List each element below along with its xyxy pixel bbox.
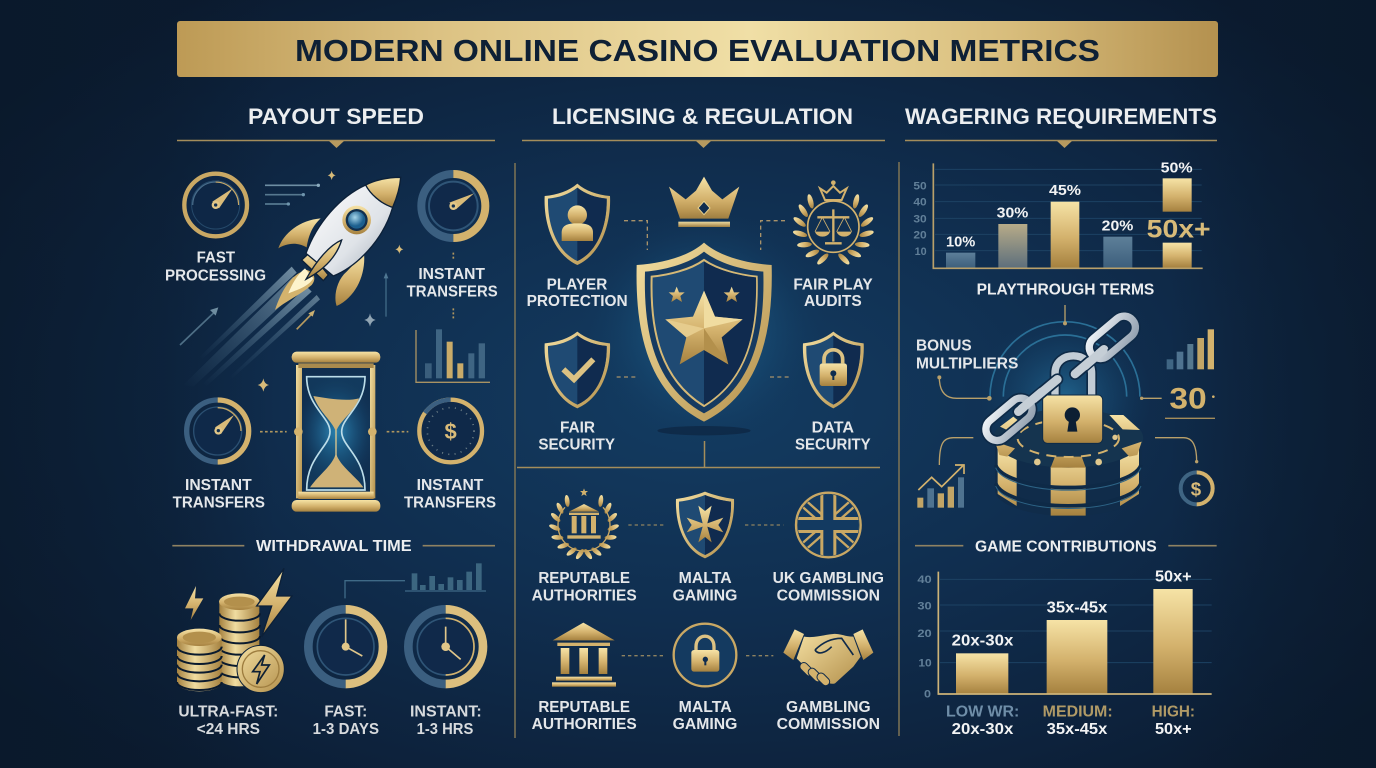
heading: wagering requirements (905, 104, 1217, 148)
bar chart: wagering percentages: 30% (997, 206, 1028, 222)
label: malta gaming 1: GAMING (673, 587, 737, 604)
label: bonus multipliers (916, 338, 1018, 372)
label: reputable authorities 1 (532, 570, 637, 604)
label: data security (795, 419, 871, 453)
icon: dollar dial: $ (445, 419, 457, 444)
icon: clock instant (408, 609, 483, 684)
label: ultra-fast tier (178, 704, 278, 738)
icon: hourglass (260, 352, 408, 512)
icon: lock circle (674, 624, 736, 686)
label: instant transfers right: TRANSFERS (404, 494, 496, 511)
callout: 30 multiplier (1140, 382, 1215, 418)
heading: payout speed (177, 104, 495, 148)
label: instant transfers left: TRANSFERS (173, 494, 265, 511)
label: fair security: FAIR (560, 419, 595, 436)
bar chart: wagering percentages: 10% (946, 235, 975, 251)
label: medium wagering: 35x-45x (1047, 721, 1108, 738)
panel: licensing and regulation (517, 104, 885, 733)
label: fast processing: PROCESSING (165, 268, 266, 285)
label: fast processing: FAST (197, 250, 235, 267)
column divider left (514, 163, 516, 738)
icon: malta shield (676, 492, 734, 558)
heading: payout speed: PAYOUT SPEED (248, 104, 424, 129)
label: ultra-fast tier: ULTRA-FAST: (178, 704, 278, 721)
label: uk gambling commission: COMMISSION (777, 587, 880, 604)
label: malta gaming 2: GAMING (673, 716, 737, 733)
label: data security: DATA (812, 419, 854, 436)
bar chart: game contributions: 10 (918, 658, 932, 670)
icon: rising chart (917, 438, 973, 508)
icon: check shield (545, 332, 610, 408)
label: uk gambling commission: UK GAMBLING (773, 570, 884, 587)
label: instant transfers top: INSTANT (418, 266, 485, 283)
label: fair security (538, 419, 615, 453)
icon: rocket with trail (183, 177, 401, 387)
label: reputable authorities 2 (532, 699, 637, 733)
icon: crown (669, 177, 739, 227)
icon: gauge fast processing (184, 174, 247, 236)
icon: player shield (545, 184, 610, 265)
bar chart: game contributions: 50x+ (1155, 569, 1192, 586)
label: malta gaming 2 (673, 699, 737, 733)
bar chart: wagering percentages: 40 (913, 197, 927, 209)
label: malta gaming 1 (673, 570, 737, 604)
label: uk gambling commission (773, 570, 884, 604)
bar chart: wagering percentages: 50 (913, 180, 927, 192)
icon: clock fast (308, 609, 383, 684)
bar chart: game contributions: 30 (917, 600, 932, 612)
mini chart: withdrawal trend (345, 563, 486, 598)
label: ultra-fast tier: <24 HRS (197, 721, 260, 738)
icon: dollar coin (1155, 438, 1213, 504)
icon: UK flag circle (793, 490, 863, 560)
bar chart: game contributions: 20x-30x (952, 633, 1014, 650)
heading: withdrawal time: WITHDRAWAL TIME (256, 538, 412, 555)
label: reputable authorities 2: AUTHORITIES (532, 716, 637, 733)
label: fast tier (313, 704, 379, 738)
bar chart: game contributions: 0 (924, 688, 931, 700)
label: reputable authorities 1: REPUTABLE (538, 570, 630, 587)
label: medium wagering (1043, 704, 1113, 738)
bar chart: wagering percentages: 50% (1161, 160, 1193, 176)
bar chart: wagering percentages: 20 (913, 230, 927, 242)
icon: authorities wreath (548, 488, 620, 560)
icon: gauge bottom left (187, 400, 249, 462)
label: low wagering: 20x-30x (952, 721, 1014, 738)
title banner: MODERN ONLINE CASINO EVALUATION METRICS (295, 33, 1100, 68)
bar chart: wagering percentages: 45% (1049, 183, 1081, 199)
label: gambling commission: COMMISSION (777, 716, 880, 733)
sparkles (258, 171, 403, 392)
mini bar chart (416, 329, 490, 382)
label: player protection (527, 276, 628, 310)
label: player protection: PLAYER (547, 276, 608, 293)
icon: dollar coin: $ (1191, 479, 1202, 500)
chain links (981, 312, 1140, 445)
label: instant tier (410, 704, 482, 738)
label: instant transfers right (404, 477, 496, 511)
callout: 30 multiplier: 30 (1169, 382, 1207, 415)
icon: gauge instant transfers (421, 174, 485, 238)
panel: wagering requirements (905, 104, 1217, 738)
label: malta gaming 1: MALTA (679, 570, 732, 587)
bar chart: wagering percentages (913, 160, 1211, 268)
label: high wagering: 50x+ (1155, 721, 1192, 738)
label: data security: SECURITY (795, 436, 871, 453)
signal bars (1167, 329, 1214, 369)
label: instant transfers left (173, 477, 265, 511)
label: fair play audits: FAIR PLAY (793, 276, 873, 293)
label: high wagering: HIGH: (1152, 704, 1195, 721)
label: low wagering: LOW WR: (946, 704, 1019, 721)
label: gambling commission (777, 699, 880, 733)
label: instant transfers top (407, 253, 498, 318)
icon: lock shield (803, 332, 864, 408)
icon: chain lock and chips (975, 305, 1155, 516)
icon: main shield with star (581, 210, 827, 443)
speed lines (180, 184, 388, 345)
label: fast processing (165, 250, 266, 285)
label: reputable authorities 1: AUTHORITIES (532, 587, 637, 604)
label: instant transfers top: TRANSFERS (407, 284, 498, 301)
label: playthrough terms: PLAYTHROUGH TERMS (977, 281, 1154, 298)
connectors row 2 (622, 654, 773, 658)
icon: scales emblem (792, 180, 874, 266)
label: fast tier: 1-3 DAYS (313, 721, 379, 738)
bar chart: wagering percentages: 50x+ (1147, 215, 1211, 243)
heading: licensing and regulation (522, 104, 885, 148)
column divider right (898, 162, 900, 736)
bar chart: game contributions: 40 (917, 574, 932, 586)
connector tree (517, 441, 880, 468)
label: fast tier: FAST: (324, 704, 367, 721)
icon: handshake (783, 629, 873, 687)
label: instant transfers right: INSTANT (417, 477, 484, 494)
panel: payout speed (165, 104, 498, 738)
connectors (617, 221, 792, 377)
label: malta gaming 2: MALTA (679, 699, 732, 716)
label: instant tier: 1-3 HRS (417, 721, 474, 738)
label: instant tier: INSTANT: (410, 704, 482, 721)
label: gambling commission: GAMBLING (786, 699, 871, 716)
bar chart: wagering percentages: 10 (915, 246, 927, 258)
label: fair security: SECURITY (538, 436, 615, 453)
label: high wagering (1152, 704, 1195, 738)
title banner (177, 21, 1218, 77)
bar chart: game contributions (917, 569, 1212, 700)
heading: wagering requirements: WAGERING REQUIREMENTS (905, 104, 1217, 129)
icon: coins and lightning (177, 568, 292, 693)
icon: dollar dial (419, 400, 482, 462)
label: medium wagering: MEDIUM: (1043, 704, 1113, 721)
connector left (938, 376, 991, 400)
label: player protection: PROTECTION (527, 293, 628, 310)
bar chart: game contributions: 20 (917, 628, 932, 640)
label: bonus multipliers: MULTIPLIERS (916, 355, 1018, 372)
bar chart: wagering percentages: 30 (913, 213, 927, 225)
heading: licensing and regulation: LICENSING & REGULATION (552, 104, 853, 129)
chip stack (993, 409, 1143, 516)
connectors row 1 (628, 523, 783, 527)
bar chart: game contributions: 35x-45x (1047, 600, 1108, 617)
label: reputable authorities 2: REPUTABLE (538, 699, 630, 716)
bar chart: wagering percentages: 20% (1102, 219, 1133, 235)
label: fair play audits: AUDITS (804, 293, 862, 310)
icon: temple (552, 623, 616, 687)
heading: game contributions: GAME CONTRIBUTIONS (975, 539, 1157, 556)
label: low wagering (946, 704, 1019, 738)
label: instant transfers left: INSTANT (185, 477, 252, 494)
label: fair play audits (793, 276, 873, 310)
label: bonus multipliers: BONUS (916, 338, 972, 355)
